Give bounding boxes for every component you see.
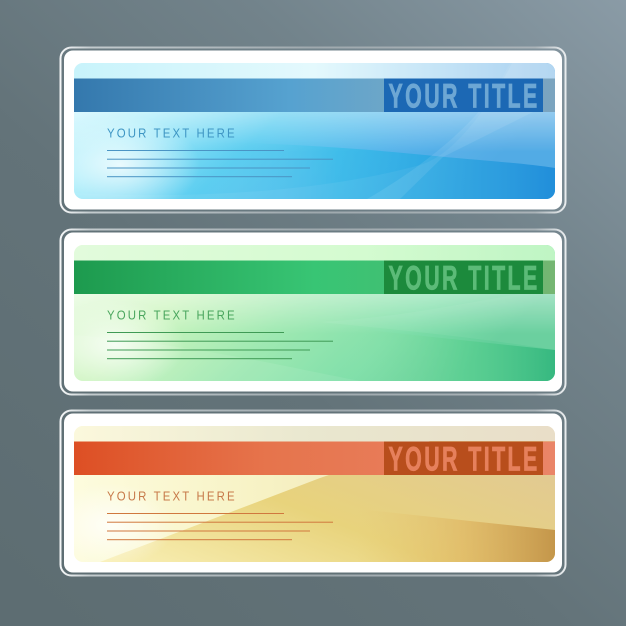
header band bbox=[74, 260, 555, 294]
text heading: YOUR TEXT HERE bbox=[107, 126, 235, 141]
text heading: YOUR TEXT HERE bbox=[107, 308, 235, 323]
title: YOUR TITLE bbox=[388, 77, 540, 116]
wave artwork bbox=[74, 245, 555, 381]
panel: green banner bbox=[45, 230, 566, 394]
title: YOUR TITLE bbox=[388, 259, 540, 298]
card frame bbox=[60, 230, 566, 394]
wave artwork bbox=[74, 63, 555, 199]
header band bbox=[74, 78, 555, 112]
header band bbox=[74, 442, 555, 475]
text heading: YOUR TEXT HERE bbox=[107, 489, 235, 504]
text lines bbox=[107, 332, 333, 359]
card frame bbox=[60, 410, 566, 576]
panel: orange banner bbox=[45, 410, 566, 576]
wave artwork bbox=[45, 426, 555, 567]
text lines bbox=[107, 513, 333, 540]
card frame bbox=[60, 48, 566, 212]
text lines bbox=[107, 150, 333, 177]
panel: blue banner bbox=[40, 48, 566, 215]
title: YOUR TITLE bbox=[388, 440, 540, 479]
